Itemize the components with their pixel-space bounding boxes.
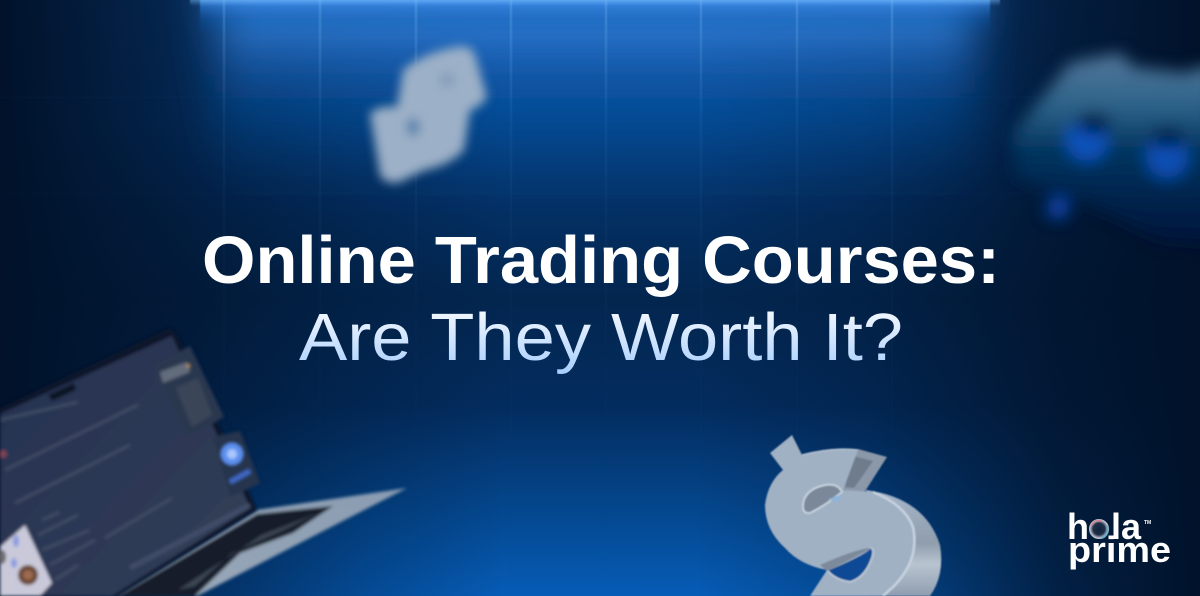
- icon: blurred dollar sign: [370, 46, 487, 183]
- dollar side faces: [842, 449, 887, 496]
- logo word hola: a: [1121, 506, 1142, 547]
- title line 2: Are They Worth It?: [299, 300, 903, 375]
- screen text lines: [0, 402, 250, 580]
- controller right button shadow: [1151, 127, 1185, 147]
- dollar front rim: [873, 492, 914, 596]
- controller left button: [1066, 119, 1108, 161]
- controller left button shadow: [1077, 112, 1111, 134]
- laptop screen: [0, 328, 260, 596]
- controller right button: [1146, 136, 1188, 178]
- logo word hola: o: [1089, 506, 1111, 547]
- title: [202, 223, 1000, 375]
- logo: hola prime: [1067, 506, 1171, 570]
- logo word prime: prime: [1068, 529, 1171, 570]
- screen notch: [48, 383, 76, 401]
- logo word hola: h: [1067, 506, 1089, 547]
- controller lower glow: [1047, 197, 1069, 219]
- logo word hola: l: [1111, 506, 1121, 547]
- side card: [153, 346, 224, 437]
- laptop base: [117, 488, 407, 596]
- icon: large 3D dollar sign: [765, 435, 941, 596]
- white profile card: [0, 525, 52, 596]
- dollar upper counter: [803, 485, 842, 513]
- logo trademark: TM: [1144, 520, 1151, 526]
- icon: blurred game controller: [1012, 53, 1200, 245]
- title line 1: Online Trading Courses:: [202, 223, 1000, 298]
- laptop: [0, 328, 407, 596]
- dollar lower counter: [827, 548, 873, 582]
- phone card: [213, 431, 260, 497]
- logo bubble: [1090, 520, 1108, 538]
- dollar front face: [765, 435, 914, 596]
